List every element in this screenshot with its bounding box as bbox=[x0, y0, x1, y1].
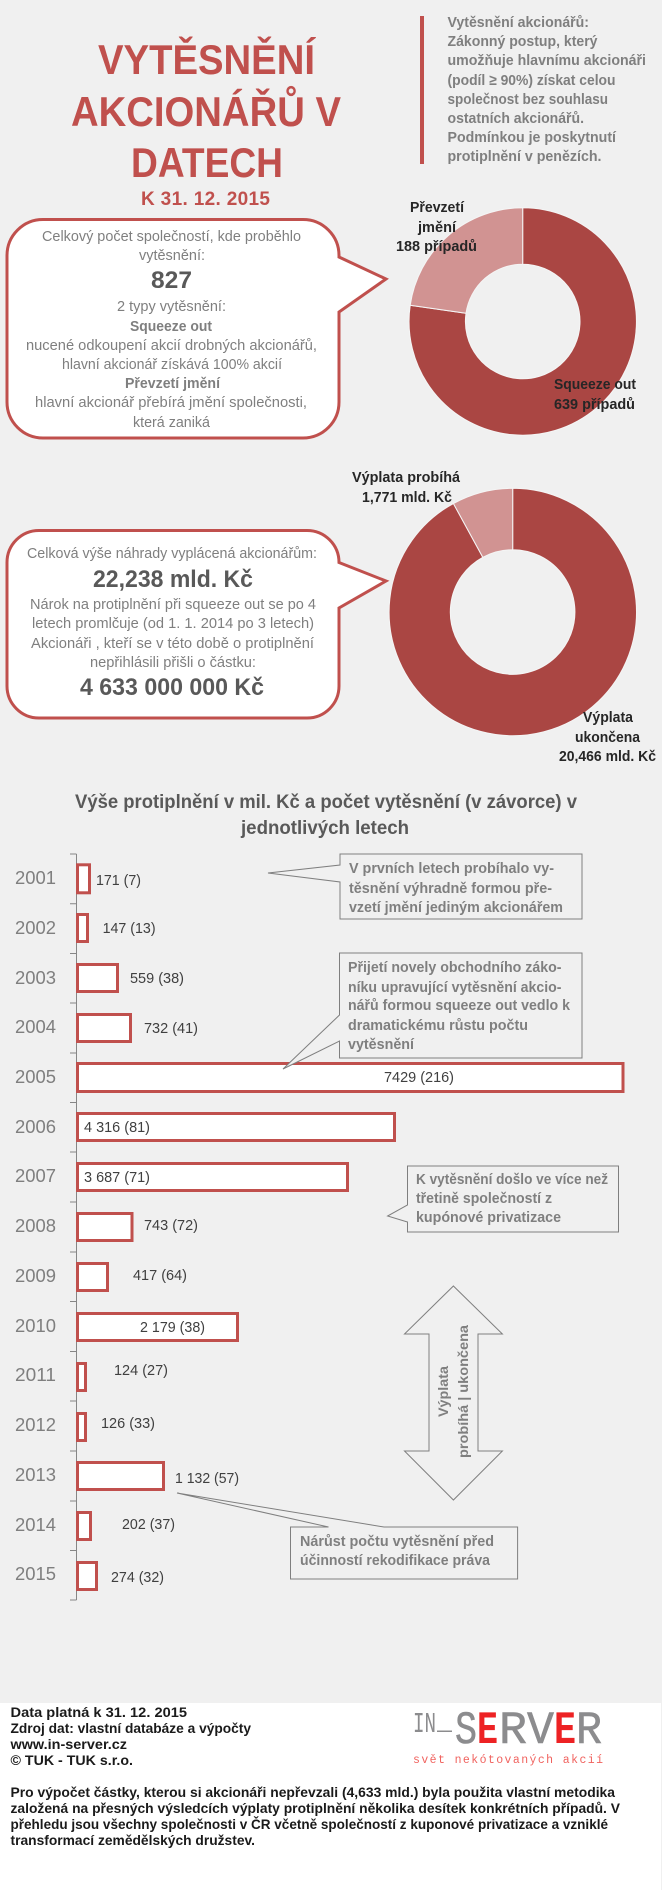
definition text: Vytěsnění akcionářů: bbox=[448, 14, 589, 31]
panel: total compensation callout: 22,238 mld. Kč bbox=[93, 566, 253, 593]
callout: amendment: vytěsnění bbox=[348, 1037, 415, 1053]
logo: IN-SERVER: V bbox=[527, 1705, 554, 1757]
bar chart: compensation by year: 202 (37) bbox=[122, 1517, 175, 1533]
bar chart: compensation by year: 2008 bbox=[15, 1215, 56, 1236]
title: DATECH bbox=[131, 139, 283, 186]
footer: methodology note: založená na přesných výsledcích výplaty protiplnění několika desítek konkrétních případů. V bbox=[10, 1800, 621, 1816]
donut chart: types of squeeze-out: Squeeze out bbox=[554, 377, 636, 393]
logo: IN-SERVER: E bbox=[477, 1705, 498, 1757]
bar chart: compensation by year: 126 (33) bbox=[101, 1416, 155, 1432]
bar chart: compensation by year: 2003 bbox=[15, 967, 56, 988]
callout: early years: V prvních letech probíhalo vy- bbox=[349, 861, 554, 877]
panel: company count callout: vytěsnění: bbox=[139, 247, 205, 264]
donut chart: types of squeeze-out: 188 případů bbox=[396, 239, 477, 255]
bar chart: compensation by year bbox=[15, 854, 623, 1600]
bar chart: compensation by year: 2010 bbox=[15, 1315, 56, 1336]
footer: source text: © TUK - TUK s.r.o. bbox=[10, 1752, 133, 1768]
callout: amendment: níku upravující vytěsnění akcio- bbox=[348, 980, 562, 996]
bar chart: compensation by year: 124 (27) bbox=[114, 1363, 168, 1379]
callout: recodification bbox=[177, 1493, 518, 1579]
definition text: Podmínkou je poskytnutí bbox=[448, 129, 617, 146]
callout: amendment: Přijetí novely obchodního záko- bbox=[348, 960, 562, 976]
bar chart: compensation by year: 2 179 (38) bbox=[140, 1320, 205, 1336]
bar chart: compensation by year: 274 (32) bbox=[111, 1570, 164, 1586]
donut chart: payout status: 20,466 mld. Kč bbox=[559, 749, 656, 765]
panel: company count callout: hlavní akcionář přebírá jmění společnosti, bbox=[35, 394, 307, 411]
bar chart: compensation by year: 171 (7) bbox=[96, 873, 141, 889]
donut chart: payout status bbox=[352, 470, 656, 765]
donut chart: types of squeeze-out bbox=[396, 200, 636, 435]
bar chart: compensation by year: 2001 bbox=[15, 867, 56, 888]
donut chart: payout status: ukončena bbox=[575, 730, 641, 746]
panel: company count callout: 827 bbox=[151, 267, 192, 294]
definition text: ostatních akcionářů. bbox=[448, 110, 584, 127]
bar chart: compensation by year: 2002 bbox=[15, 917, 56, 938]
footer background bbox=[0, 1703, 661, 1890]
bar chart: compensation by year: 3 687 (71) bbox=[84, 1170, 150, 1186]
definition text: umožňuje hlavnímu akcionáři bbox=[448, 52, 646, 69]
subtitle: date: K 31. 12. 2015 bbox=[141, 189, 270, 210]
donut chart: types of squeeze-out: 639 případů bbox=[554, 397, 635, 413]
panel: company count callout: Převzetí jmění bbox=[125, 375, 221, 392]
callout: early years: vzetí jmění jediným akcionářem bbox=[349, 900, 563, 916]
logo: IN-SERVER: S bbox=[455, 1705, 477, 1757]
bar chart: compensation by year: 1 132 (57) bbox=[175, 1471, 239, 1487]
callout: early years: těsnění výhradně formou pře- bbox=[349, 881, 552, 897]
callout: amendment: dramatickému růstu počtu bbox=[348, 1018, 528, 1034]
callout: recodification: účinností rekodifikace práva bbox=[300, 1553, 491, 1569]
bar chart: compensation by year: 7429 (216) bbox=[384, 1070, 454, 1086]
donut chart: payout status: 1,771 mld. Kč bbox=[362, 490, 452, 506]
bar chart: compensation by year: 4 316 (81) bbox=[84, 1120, 150, 1136]
callout: amendment bbox=[283, 953, 582, 1069]
panel: company count callout: hlavní akcionář získává 100% akcií bbox=[62, 356, 283, 373]
donut chart: types of squeeze-out: jmění bbox=[417, 220, 457, 236]
double arrow: payout status: Výplata bbox=[435, 1366, 451, 1417]
donut chart: types of squeeze-out: Převzetí bbox=[410, 200, 465, 216]
callout: voucher privatisation: třetině společností z bbox=[416, 1191, 552, 1207]
chart heading: Výše protiplnění v mil. Kč a počet vytěsnění (v závorce) v bbox=[75, 792, 577, 813]
definition text bbox=[448, 14, 646, 165]
callout: voucher privatisation: K vytěsnění došlo ve více než bbox=[416, 1172, 608, 1188]
footer: source text: Zdroj dat: vlastní databáze a výpočty bbox=[10, 1720, 251, 1736]
definition text: společnost bez souhlasu bbox=[448, 91, 608, 108]
chart heading bbox=[75, 792, 577, 839]
logo: IN-SERVER: R bbox=[576, 1705, 602, 1757]
bar chart: compensation by year: 2012 bbox=[15, 1414, 56, 1435]
bar chart: compensation by year: 743 (72) bbox=[144, 1218, 198, 1234]
bar chart: compensation by year: 2009 bbox=[15, 1265, 56, 1286]
logo: IN-SERVER: svět nekótovaných akcií bbox=[413, 1754, 603, 1767]
logo: IN-SERVER: E bbox=[554, 1705, 576, 1757]
title: AKCIONÁŘŮ V bbox=[71, 84, 341, 135]
donut chart: payout status: Výplata bbox=[583, 710, 634, 726]
panel: total compensation callout bbox=[7, 530, 386, 718]
panel: total compensation callout: Nárok na protiplnění při squeeze out se po 4 bbox=[30, 596, 316, 613]
panel: total compensation callout: letech promlčuje (od 1. 1. 2014 po 3 letech) bbox=[32, 615, 314, 632]
definition text: protiplnění v penězích. bbox=[448, 148, 602, 165]
callout: voucher privatisation: kupónové privatizace bbox=[416, 1210, 561, 1226]
bar chart: compensation by year: 147 (13) bbox=[103, 921, 156, 937]
double arrow: payout status: probíhá | ukončena bbox=[455, 1325, 471, 1458]
panel: total compensation callout: Akcionáři , kteří se v této době o protiplnění bbox=[31, 635, 315, 652]
bar chart: compensation by year: 559 (38) bbox=[130, 971, 184, 987]
footer: source text bbox=[9, 1704, 251, 1768]
title: VYTĚSNĚNÍ bbox=[98, 35, 316, 83]
accent bar bbox=[420, 16, 424, 164]
bar chart: compensation by year: 2005 bbox=[15, 1066, 56, 1087]
donut chart: payout status: Výplata probíhá bbox=[352, 470, 461, 486]
logo: IN-SERVER bbox=[413, 1705, 603, 1767]
panel: company count callout: Squeeze out bbox=[130, 318, 212, 335]
bar chart: compensation by year: 2015 bbox=[15, 1563, 56, 1584]
bar chart: compensation by year: 417 (64) bbox=[133, 1268, 187, 1284]
bar chart: compensation by year: 732 (41) bbox=[144, 1021, 198, 1037]
bar chart: compensation by year: 2011 bbox=[15, 1364, 56, 1385]
panel: total compensation callout: Celková výše náhrady vyplácená akcionářům: bbox=[27, 545, 317, 562]
callout: voucher privatisation bbox=[388, 1166, 618, 1232]
logo: IN-SERVER: IN bbox=[413, 1708, 436, 1741]
definition text: (podíl ≥ 90%) získat celou bbox=[448, 72, 616, 89]
footer: methodology note: transformací zemědělských družstev. bbox=[10, 1832, 255, 1848]
panel: total compensation callout: nepřihlásili přišli o částku: bbox=[90, 654, 256, 671]
chart heading: jednotlivých letech bbox=[240, 818, 409, 839]
footer: source text: Data platná k 31. 12. 2015 bbox=[10, 1704, 187, 1720]
bar chart: compensation by year: 2007 bbox=[15, 1165, 56, 1186]
bar chart: compensation by year: 2004 bbox=[15, 1016, 56, 1037]
panel: company count callout: nucené odkoupení akcií drobných akcionářů, bbox=[26, 337, 317, 354]
callout: amendment: nářů formou squeeze out vedlo k bbox=[348, 998, 571, 1014]
footer: methodology note: Pro výpočet částky, kterou si akcionáři nepřevzali (4,633 mld.) byla použita vlastní metodika bbox=[10, 1784, 615, 1800]
footer: methodology note bbox=[10, 1784, 621, 1848]
bar chart: compensation by year: 2006 bbox=[15, 1116, 56, 1137]
definition text: Zákonný postup, který bbox=[448, 33, 598, 50]
panel: total compensation callout: 4 633 000 000 Kč bbox=[80, 674, 264, 701]
bar chart: compensation by year: 2014 bbox=[15, 1514, 56, 1535]
logo: IN-SERVER: R bbox=[499, 1705, 527, 1757]
panel: company count callout bbox=[7, 220, 386, 438]
footer: source text: www.in-server.cz bbox=[9, 1736, 127, 1752]
bar chart: compensation by year: 2013 bbox=[15, 1464, 56, 1485]
panel: company count callout: Celkový počet společností, kde proběhlo bbox=[42, 228, 301, 245]
title bbox=[71, 35, 341, 186]
panel: company count callout: 2 typy vytěsnění: bbox=[117, 298, 226, 315]
callout: recodification: Nárůst počtu vytěsnění před bbox=[300, 1534, 494, 1550]
callout: early years bbox=[268, 854, 582, 919]
footer: methodology note: přehledu jsou všechny společnosti v ČR včetně společností z kuponové privatizace a vzniklé bbox=[10, 1815, 608, 1832]
double arrow: payout status bbox=[404, 1286, 502, 1500]
panel: company count callout: která zaniká bbox=[133, 414, 211, 431]
